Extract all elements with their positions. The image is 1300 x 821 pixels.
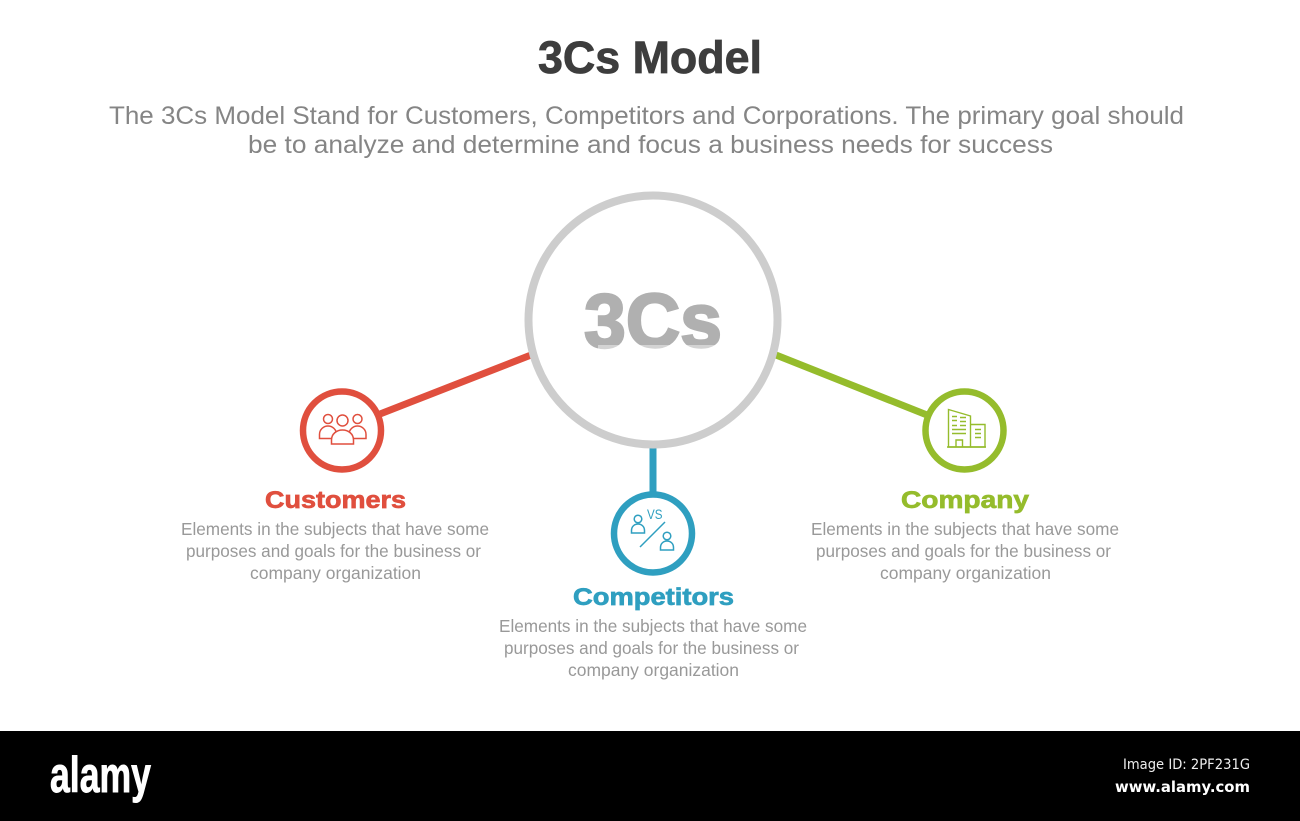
footer logo: alamy (50, 747, 151, 803)
heading: competitors: Competitors (573, 584, 734, 611)
connector: company (776, 355, 927, 415)
footer image id: Image ID: 2PF231G (1123, 757, 1250, 773)
block: competitors (499, 584, 807, 680)
text: competitors description: Elements in the subjects that have some (499, 616, 807, 636)
title: 3Cs Model (538, 32, 762, 83)
icon: office buildings (947, 410, 986, 447)
icon: versus people: VS (647, 506, 662, 522)
text: customers description: company organization (250, 563, 421, 583)
text: competitors description: company organization (568, 660, 739, 680)
text: company description: Elements in the subjects that have some (811, 519, 1119, 539)
block: company (811, 487, 1119, 583)
text: customers description: Elements in the subjects that have some (181, 519, 489, 539)
node: customers (303, 392, 381, 470)
text: company description: purposes and goals for the business or (816, 541, 1111, 561)
text: competitors description: purposes and goals for the business or (504, 638, 799, 658)
node: competitors (614, 494, 692, 572)
connector: competitors (650, 446, 656, 494)
heading: company: Company (901, 487, 1030, 514)
node: company (926, 392, 1004, 470)
subtitle: The 3Cs Model Stand for Customers, Competitors and Corporations. The primary goal should (109, 102, 1184, 130)
central label: 3Cs (584, 279, 722, 364)
text: customers description (181, 519, 489, 583)
text: competitors description (499, 616, 807, 680)
heading: customers: Customers (265, 487, 406, 514)
block: customers (181, 487, 489, 583)
subtitle (109, 102, 1184, 159)
footer url: www.alamy.com (1115, 778, 1250, 796)
footer bar (0, 731, 1300, 821)
connector: customers (380, 355, 531, 414)
icon: people group (320, 414, 366, 444)
text: company description: company organization (880, 563, 1051, 583)
text: company description (811, 519, 1119, 583)
central circle (528, 196, 778, 444)
subtitle: be to analyze and determine and focus a business needs for success (248, 131, 1053, 159)
text: customers description: purposes and goals for the business or (186, 541, 481, 561)
